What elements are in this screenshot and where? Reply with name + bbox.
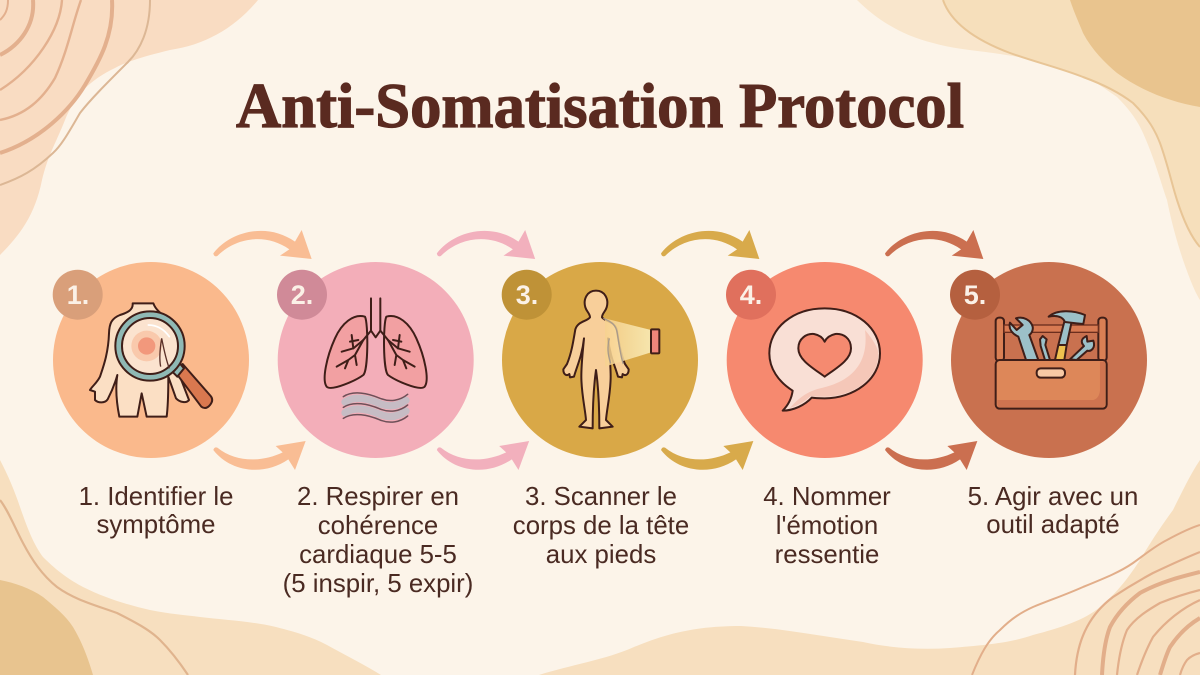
label: step 2: cardiaque 5-5 [299, 541, 457, 569]
circle 2 [278, 262, 474, 458]
step 5 [950, 262, 1147, 458]
label: step 2: cohérence [318, 512, 438, 540]
label: step 3: 3. Scanner le [525, 483, 677, 511]
badge 3 [502, 270, 552, 320]
badge 2: 2. [291, 280, 313, 310]
label: step 1: symptôme [97, 511, 215, 539]
label: step 5: 5. Agir avec un [968, 483, 1138, 511]
badge 4 [726, 270, 776, 320]
step 1 [53, 262, 249, 458]
icon: toolbox with tools [996, 311, 1107, 409]
label: step 1: 1. Identifier le [79, 483, 233, 511]
icon: body under magnifying glass [90, 303, 212, 417]
arrows: step 1 to 2 [213, 230, 312, 470]
badge 3: 3. [516, 280, 538, 310]
icon: speech bubble with heart [769, 308, 880, 411]
arrows: step 2 to 3 [437, 230, 535, 470]
decorative blob: bottom [0, 460, 1200, 675]
label: step 4: ressentie [775, 541, 879, 569]
badge 5: 5. [964, 280, 986, 310]
title: Anti-Somatisation Protocol [236, 70, 964, 141]
icon: lungs with breath waves [325, 298, 427, 422]
step 3 [502, 262, 698, 458]
badge 4: 4. [740, 280, 762, 310]
icon: body scan figure [563, 291, 659, 428]
badge 5 [950, 270, 1000, 320]
circle 3 [502, 262, 698, 458]
badge 1: 1. [67, 280, 89, 310]
decorative blob: top left [0, 0, 258, 255]
label: step 4: l'émotion [776, 512, 878, 540]
circle 1 [53, 262, 249, 458]
arrows: step 4 to 5 [885, 230, 983, 470]
step 4 [726, 262, 923, 458]
label: step 2: 2. Respirer en [297, 483, 459, 511]
badge 2 [277, 270, 327, 320]
label: step 3: corps de la tête [513, 512, 689, 540]
label: step 5: outil adapté [986, 511, 1120, 539]
label: step 2: (5 inspir, 5 expir) [283, 570, 473, 598]
label: step 4: 4. Nommer [763, 483, 891, 511]
label: step 3: aux pieds [546, 541, 656, 569]
circle 4 [727, 262, 923, 458]
circle 5 [951, 262, 1147, 458]
step 2 [277, 262, 474, 458]
badge 1 [53, 270, 103, 320]
decorative blob: top right [857, 0, 1200, 300]
arrows: step 3 to 4 [661, 230, 759, 470]
